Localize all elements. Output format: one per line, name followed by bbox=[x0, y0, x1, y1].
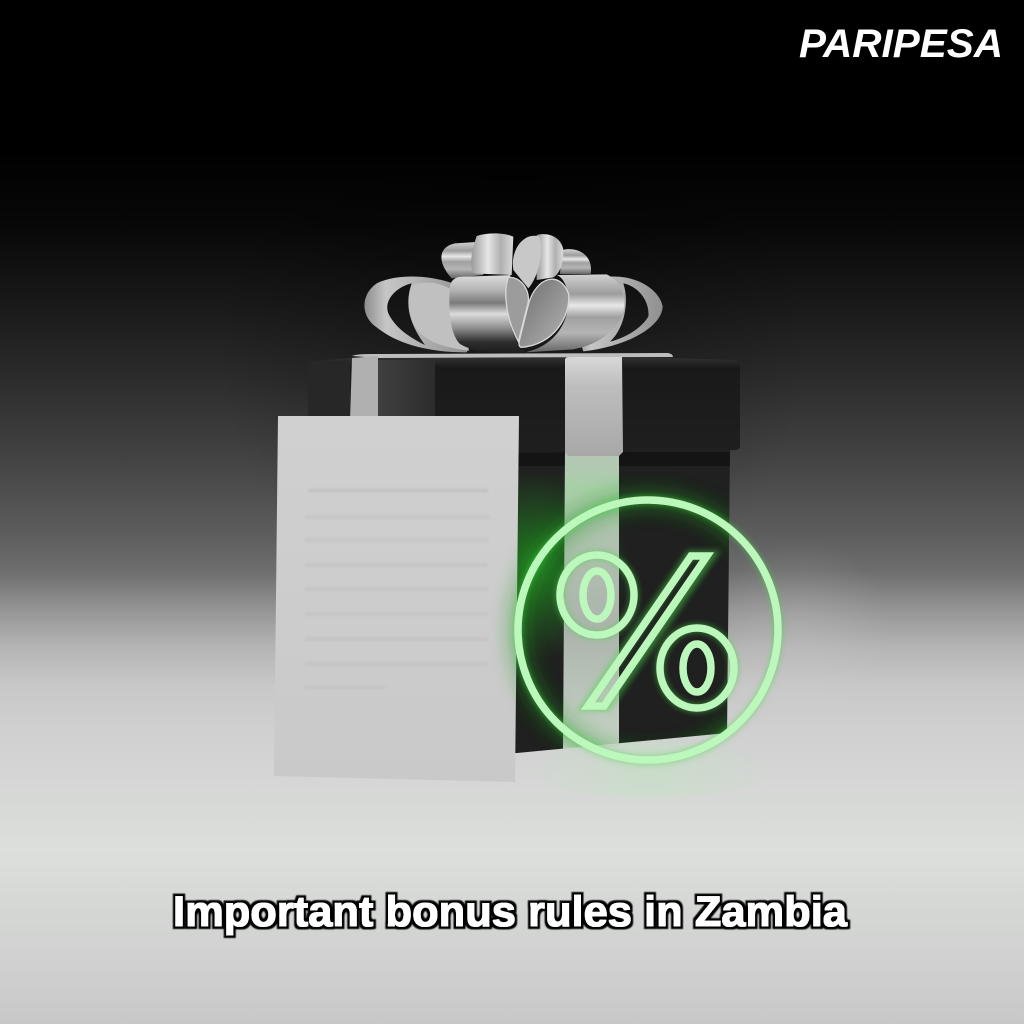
upper right loop bbox=[537, 234, 563, 280]
document sheet bbox=[274, 416, 519, 782]
neon percent badge bbox=[518, 500, 778, 760]
title: Important bonus rules in Zambia bbox=[173, 888, 848, 936]
heart left lobe bbox=[506, 277, 528, 342]
gift box bbox=[308, 353, 740, 753]
box body bbox=[440, 450, 730, 753]
percent sign bbox=[560, 555, 734, 708]
logo: PARIPESA bbox=[799, 22, 1003, 66]
background dark vignette bbox=[200, 100, 824, 580]
vertical ribbon on body bbox=[563, 450, 619, 750]
right big loop bbox=[573, 277, 663, 351]
right front ribbon bbox=[525, 274, 624, 352]
back top loop bbox=[471, 233, 513, 275]
back left loop bbox=[441, 242, 483, 278]
badge glow bbox=[518, 500, 778, 760]
heart right lobe bbox=[519, 279, 569, 347]
document text lines bbox=[305, 489, 490, 689]
lid ribbon strap right bbox=[565, 357, 623, 456]
badge circle bbox=[518, 500, 778, 760]
box lid bbox=[308, 353, 740, 454]
green glow on the box bbox=[518, 500, 778, 760]
back right loop bbox=[560, 249, 591, 274]
silver ribbon bow bbox=[364, 233, 663, 353]
left inner loop bbox=[409, 283, 469, 351]
left front ribbon bbox=[449, 275, 527, 353]
floor green glow bbox=[530, 742, 770, 798]
lid top highlight bbox=[352, 353, 673, 358]
upper heart lobe bbox=[513, 236, 541, 288]
lid ribbon strap left bbox=[350, 356, 378, 420]
left big loop bbox=[364, 276, 473, 352]
background side light bbox=[710, 540, 890, 720]
